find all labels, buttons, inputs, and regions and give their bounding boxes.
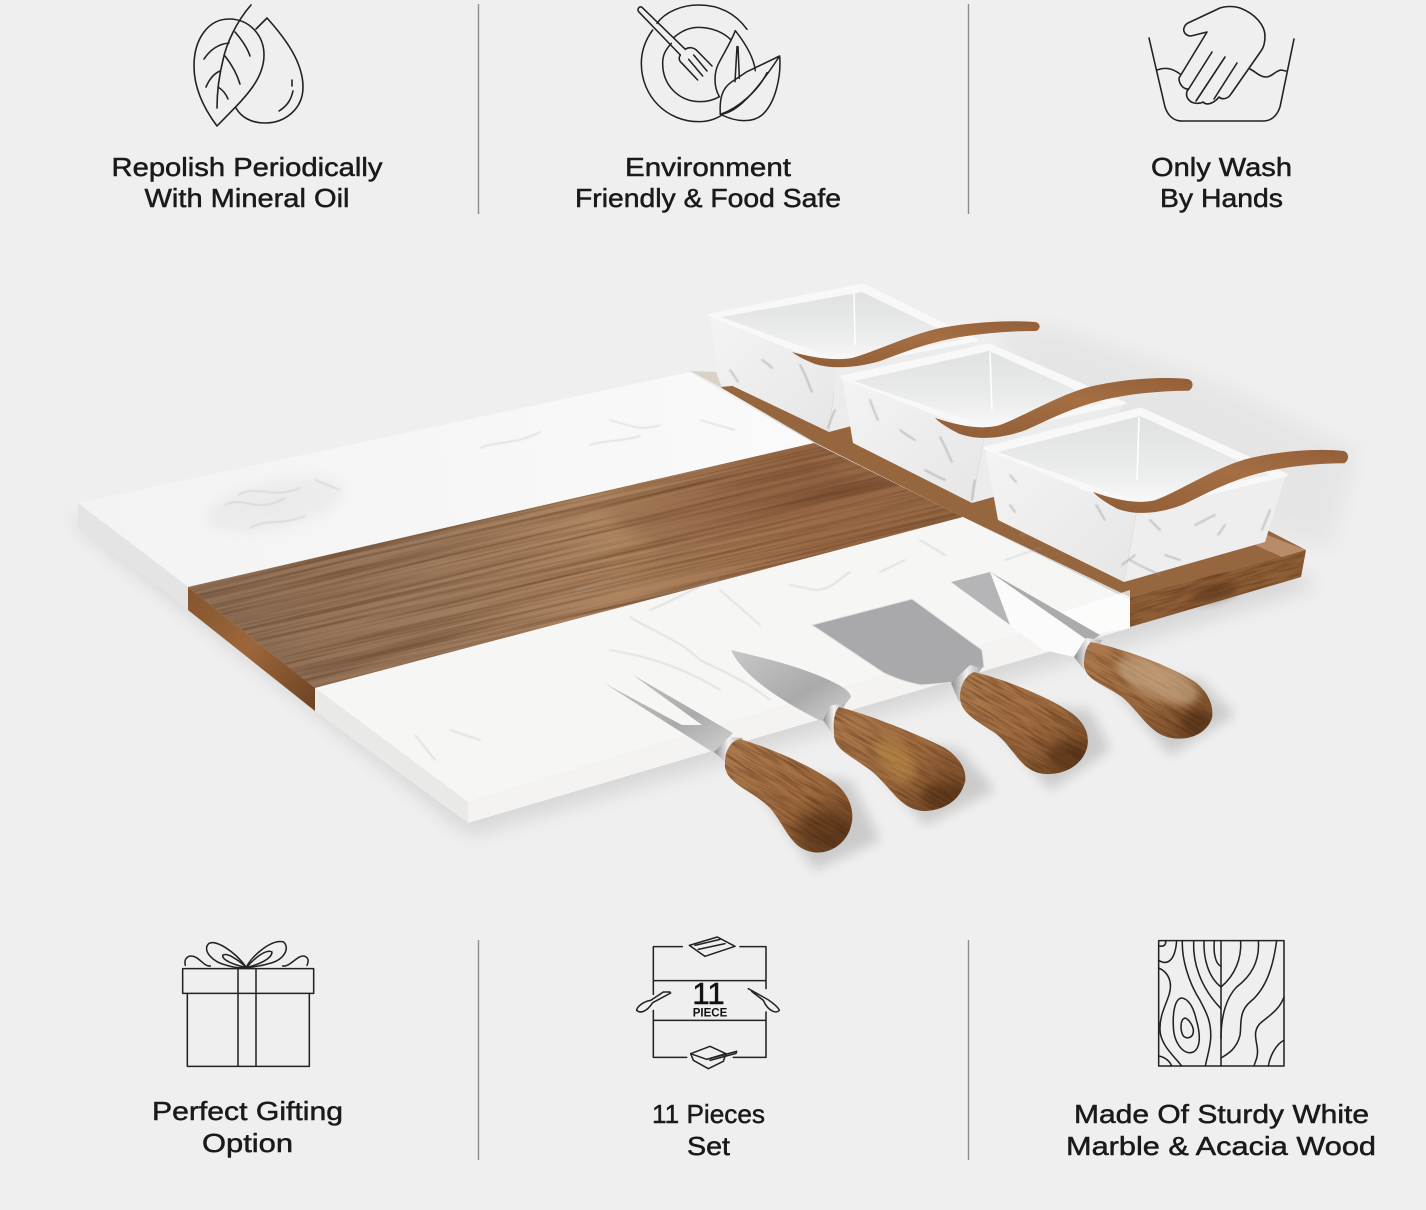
- heading: 11 pieces: Set: [687, 1131, 731, 1161]
- label: 11: 11: [692, 976, 725, 1011]
- tray: [720, 386, 1306, 627]
- panel: perfect gifting option: [152, 942, 343, 1158]
- panel: environment friendly: [575, 5, 841, 213]
- cheese knife: [731, 650, 966, 811]
- spoon 1: [792, 321, 1040, 367]
- icon: plate, fork and leaves: [638, 5, 780, 122]
- heading: perfect gifting: Option: [202, 1128, 293, 1158]
- panel: 11 pieces set: [637, 937, 779, 1161]
- spoon 3: [1093, 450, 1348, 513]
- bowl 1: [710, 285, 976, 432]
- fork: [605, 676, 852, 852]
- marble top slab: [78, 371, 814, 609]
- heading: sturdy marble and acacia: Made Of Sturdy White: [1074, 1099, 1369, 1129]
- heading: sturdy marble and acacia: Marble & Acacia Wood: [1066, 1131, 1376, 1161]
- divider: bottom right: [968, 940, 970, 1160]
- heading: environment: Environment: [625, 152, 792, 182]
- divider: top left: [478, 4, 480, 214]
- marble bottom slab: [315, 517, 1130, 823]
- heading: only wash: Only Wash: [1151, 152, 1292, 182]
- icon: wood grain: [1159, 941, 1284, 1066]
- panel: repolish with mineral oil: [112, 5, 382, 213]
- bowl 3: [985, 409, 1286, 582]
- label: piece: PIECE: [693, 1008, 728, 1020]
- bowl 2: [842, 345, 1124, 503]
- product photo: board, bowls and knives: [70, 264, 1360, 905]
- heading: repolish: With Mineral Oil: [144, 183, 350, 213]
- heading: perfect gifting: Perfect Gifting: [152, 1096, 343, 1126]
- bowl glow shadow: [990, 325, 1360, 550]
- board shadow: [70, 400, 1320, 835]
- icon: hand in basin: [1149, 6, 1294, 121]
- heading: environment: Friendly & Food Safe: [575, 183, 841, 213]
- icon: two leaves: [194, 5, 303, 126]
- heading: only wash: By Hands: [1160, 183, 1283, 213]
- panel: only wash by hands: [1149, 6, 1294, 213]
- flat knife: [951, 572, 1212, 739]
- panel: made of marble and acacia wood: [1066, 941, 1376, 1161]
- wood middle stripe: [188, 443, 963, 711]
- spoon 2: [935, 378, 1193, 438]
- knife shadows: [745, 670, 1235, 870]
- divider: top right: [968, 4, 970, 214]
- divider: bottom left: [478, 940, 480, 1160]
- heading: repolish: Repolish Periodically: [112, 152, 382, 182]
- cheese spreader: [811, 598, 1088, 774]
- icon: 11 piece frame: [637, 937, 779, 1069]
- heading: 11 pieces: 11 Pieces: [652, 1099, 765, 1129]
- icon: gift box: [183, 942, 314, 1066]
